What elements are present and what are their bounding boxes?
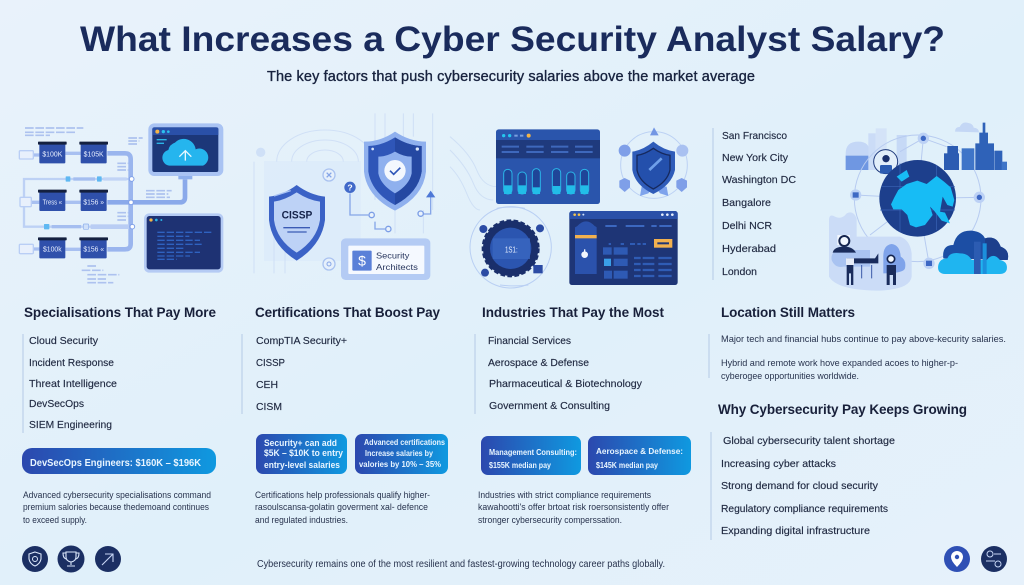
list: industries: Financial Services (488, 335, 571, 347)
list: certifications: CISM (256, 401, 282, 413)
heading: Specialisations That Pay More (24, 305, 216, 320)
list: specialisations: SIEM Engineering (29, 419, 112, 431)
list: cities: Delhi NCR (722, 220, 772, 232)
icon: portrait badge (874, 150, 898, 174)
callout: advanced certifications: Advanced certifications (364, 437, 445, 447)
salary box: $105K (79, 142, 108, 163)
callout: advanced certifications: Increase salaries by (365, 448, 433, 458)
text block: industries note (478, 490, 669, 525)
callout: Security+ pay: Security+ can add (264, 438, 337, 449)
salary box: $100k (38, 237, 67, 258)
icon: code terminal (144, 213, 223, 273)
card: Security Architects: Architects (376, 262, 419, 272)
list: growth drivers: Strong demand for cloud security (721, 480, 879, 492)
text block: certifications note (255, 490, 430, 525)
list: growth drivers (711, 432, 895, 540)
text block: industries note: Industries with strict compliance requirements (478, 490, 651, 500)
icon: shield badge (22, 546, 48, 572)
icon: team at desk (829, 212, 912, 291)
list: certifications (242, 334, 347, 414)
dashboard: analytics (569, 211, 678, 285)
salary box: $100k: $100k (43, 245, 62, 254)
panel: specialisations (19, 123, 223, 525)
salary box: $100K: $100K (42, 149, 63, 158)
list: certifications: CEH (256, 379, 278, 391)
list: certifications: CISSP (256, 357, 285, 369)
callout: aerospace and defense pay (588, 436, 691, 475)
icon: trophy (58, 546, 84, 572)
text block: location note: Major tech and financial hubs continue to pay above-kecurity salaries. (721, 334, 1006, 344)
list: cities: Washington DC (722, 174, 796, 186)
icon: network nodes (850, 133, 985, 269)
panel: certifications (242, 113, 448, 525)
callout: management consulting pay: $155K median pay (489, 461, 551, 470)
icon: globe (879, 160, 956, 237)
list: cities: Hyderabad (722, 243, 776, 255)
list: growth drivers: Increasing cyber attacks (721, 458, 836, 470)
subtitle: The key factors that push cybersecurity salaries above the market average (267, 69, 755, 85)
callout: Security+ pay: entry-level salaries (264, 460, 340, 471)
card: Security Architects: Security (376, 251, 410, 261)
illustration: global network (829, 122, 1008, 291)
callout: advanced certifications: valories by 10% – 35% (359, 459, 441, 469)
callout: aerospace and defense pay: Aerospace & Defense: (596, 446, 683, 456)
salary box: $156 lower (79, 237, 108, 258)
list: industries: Government & Consulting (489, 400, 610, 412)
text block: industries note: stronger cybersecurity comperssation. (478, 515, 622, 525)
text block: specialisations note: to exceed supply. (23, 515, 87, 525)
illustration: salary pipelines to cloud monitor (19, 123, 223, 283)
text block: location note (709, 334, 1006, 381)
illustration: certification shields (254, 113, 435, 280)
icon: verified shield (364, 132, 426, 211)
text block: certifications note: and regulated industries. (255, 515, 348, 525)
callout: management consulting pay (481, 436, 581, 475)
icon: route settings (981, 546, 1007, 572)
text block: specialisations note: premium salories because thedemoand continues (23, 502, 209, 512)
card: Security Architects (341, 238, 430, 280)
salary box: $105K: $105K (84, 149, 104, 158)
icon: CISSP shield: CISSP (282, 209, 312, 221)
icon: gear target (470, 207, 551, 288)
text block: location note: Hybrid and remote work hove expanded acoes to higher-p- (721, 358, 958, 368)
card: Security Architects: $ (358, 253, 366, 269)
panel: industries (450, 127, 691, 525)
list: specialisations: Cloud Security (29, 335, 99, 347)
dashboard: finance (496, 129, 600, 204)
icon: cloud (938, 231, 1008, 274)
icon: gear target: 1S1: (505, 245, 518, 255)
callout: advanced certifications (355, 434, 448, 474)
text block: specialisations note: Advanced cybersecurity specialisations command (23, 490, 211, 500)
list: cities: London (722, 266, 757, 278)
heading: why pay keeps growing: Why Cybersecurity Pay Keeps Growing (718, 402, 967, 417)
list: cities (713, 128, 796, 280)
icon: location pin (944, 546, 970, 572)
text block: specialisations note (23, 490, 211, 525)
salary box: Tress: Tress « (43, 198, 62, 207)
callout: DevSecOps salary: DevSecOps Engineers: $160K – $196K (30, 457, 201, 469)
list: certifications: CompTIA Security+ (256, 335, 347, 347)
heading: Certifications That Boost Pay (255, 305, 440, 320)
list: industries: Aerospace & Defense (488, 357, 589, 369)
panel: location (709, 122, 1008, 540)
heading: Industries That Pay the Most (482, 305, 664, 320)
list: cities: San Francisco (722, 130, 787, 142)
list: specialisations (23, 334, 117, 433)
list: specialisations: DevSecOps (29, 398, 84, 410)
list: industries: Pharmaceutical & Biotechnology (489, 378, 643, 390)
icon: CISSP shield (269, 185, 325, 261)
callout: Security+ pay (256, 434, 347, 474)
icon: award shield (619, 127, 688, 198)
list: growth drivers: Regulatory compliance requirements (721, 503, 888, 515)
list: specialisations: Incident Response (29, 357, 114, 369)
icon: skyline (944, 123, 1007, 170)
text block: certifications note: Certifications help professionals qualify higher- (255, 490, 430, 500)
footer note: Cybersecurity remains one of the most resilient and fastest-growing technology career paths globally. (257, 559, 665, 570)
list: cities: New York City (722, 152, 789, 164)
list: specialisations: Threat Intelligence (29, 378, 117, 390)
list: growth drivers: Expanding digital infrastructure (721, 525, 870, 537)
icon: cloud monitor (148, 123, 223, 179)
callout: Security+ pay: $5K – $10K to entry (264, 448, 344, 459)
title: What Increases a Cyber Security Analyst Salary? (80, 20, 945, 59)
callout: aerospace and defense pay: $145K median pay (596, 461, 658, 470)
callout: DevSecOps salary (22, 448, 216, 474)
salary box: $156 lower: $156 « (83, 245, 104, 254)
list: growth drivers: Global cybersecurity talent shortage (723, 435, 895, 447)
text block: certifications note: rasoulscansa-golatin goverment xal- defence (255, 502, 428, 512)
list: cities: Bangalore (722, 197, 771, 209)
salary box: Tress (38, 190, 67, 211)
text block: industries note: kawahootti's offer brtoat risk roersonsistently offer (478, 502, 669, 512)
illustration: certification shields: ? (347, 183, 353, 193)
salary box: $100K (38, 142, 67, 163)
salary box: $156: $156 » (83, 198, 104, 207)
heading: Location Still Matters (721, 305, 855, 320)
callout: management consulting pay: Management Consulting: (489, 448, 577, 457)
list: industries (475, 334, 643, 414)
icon: growth arrow (95, 546, 121, 572)
salary box: $156 (79, 190, 108, 211)
illustration: industry dashboards (450, 127, 688, 288)
text block: location note: cyberogee opportunities worldwide. (721, 371, 859, 381)
